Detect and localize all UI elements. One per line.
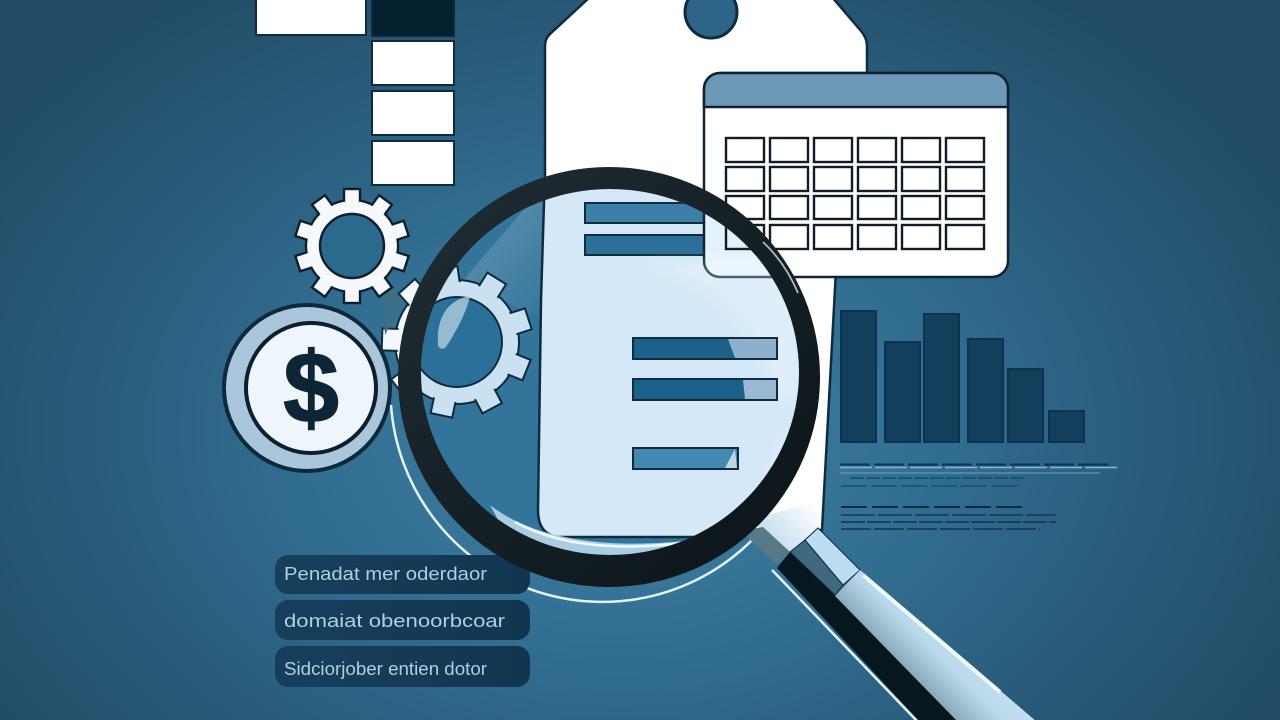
lens contents <box>421 189 799 555</box>
magnifier handle <box>745 500 1037 720</box>
handle grey neck <box>745 527 790 565</box>
handle shaft <box>835 570 1037 720</box>
bar chart <box>841 311 1084 442</box>
document bar 2 <box>585 235 707 255</box>
upper-right lens sheen <box>658 254 798 396</box>
magnified gear <box>421 265 533 419</box>
small gear <box>295 189 409 303</box>
magnified document <box>536 189 799 538</box>
pill 1 <box>275 555 530 594</box>
chart caption lines <box>840 464 1118 529</box>
ring highlight <box>763 242 798 293</box>
handle collar <box>790 540 843 595</box>
handle dark strip <box>777 552 962 720</box>
pill 3 <box>275 646 530 687</box>
document bar 1 <box>585 203 707 223</box>
tag hole <box>685 0 737 38</box>
pill 2 <box>275 600 530 640</box>
shadow wedge between gears <box>378 288 403 335</box>
document bar 5 <box>633 448 738 469</box>
dollar sign: $ <box>283 332 339 444</box>
magnifier ring <box>398 167 820 587</box>
lower lens crescent <box>490 505 682 555</box>
calendar <box>704 73 1008 277</box>
handle collar light <box>805 528 860 585</box>
pill 3: Sidciorjober entien dotor <box>284 659 487 679</box>
lens background <box>421 189 799 555</box>
document bar 4 <box>633 379 777 400</box>
upper-left lens glare <box>464 201 543 310</box>
large gear behind lens <box>382 266 532 418</box>
price tag <box>545 0 867 530</box>
gear glint <box>438 296 470 349</box>
magnified calendar corner <box>702 212 772 278</box>
magnified calendar cell <box>724 226 751 250</box>
top-left colour swatches <box>256 0 454 185</box>
calendar header <box>704 73 1008 107</box>
pill 1: Penadat mer oderdaor <box>284 564 487 584</box>
pill 2: domaiat obenoorbcoar <box>284 611 505 631</box>
calendar grid <box>726 138 984 249</box>
lower-right lens glare <box>775 442 784 460</box>
handle white line <box>772 570 918 720</box>
document bar 3 <box>633 338 777 359</box>
handle highlight <box>863 575 1000 692</box>
handle light neck <box>750 500 822 552</box>
thin white lens reflection arc <box>391 405 757 602</box>
crescent white edge <box>514 520 681 548</box>
label pills <box>275 555 530 687</box>
dollar coin <box>224 305 390 471</box>
